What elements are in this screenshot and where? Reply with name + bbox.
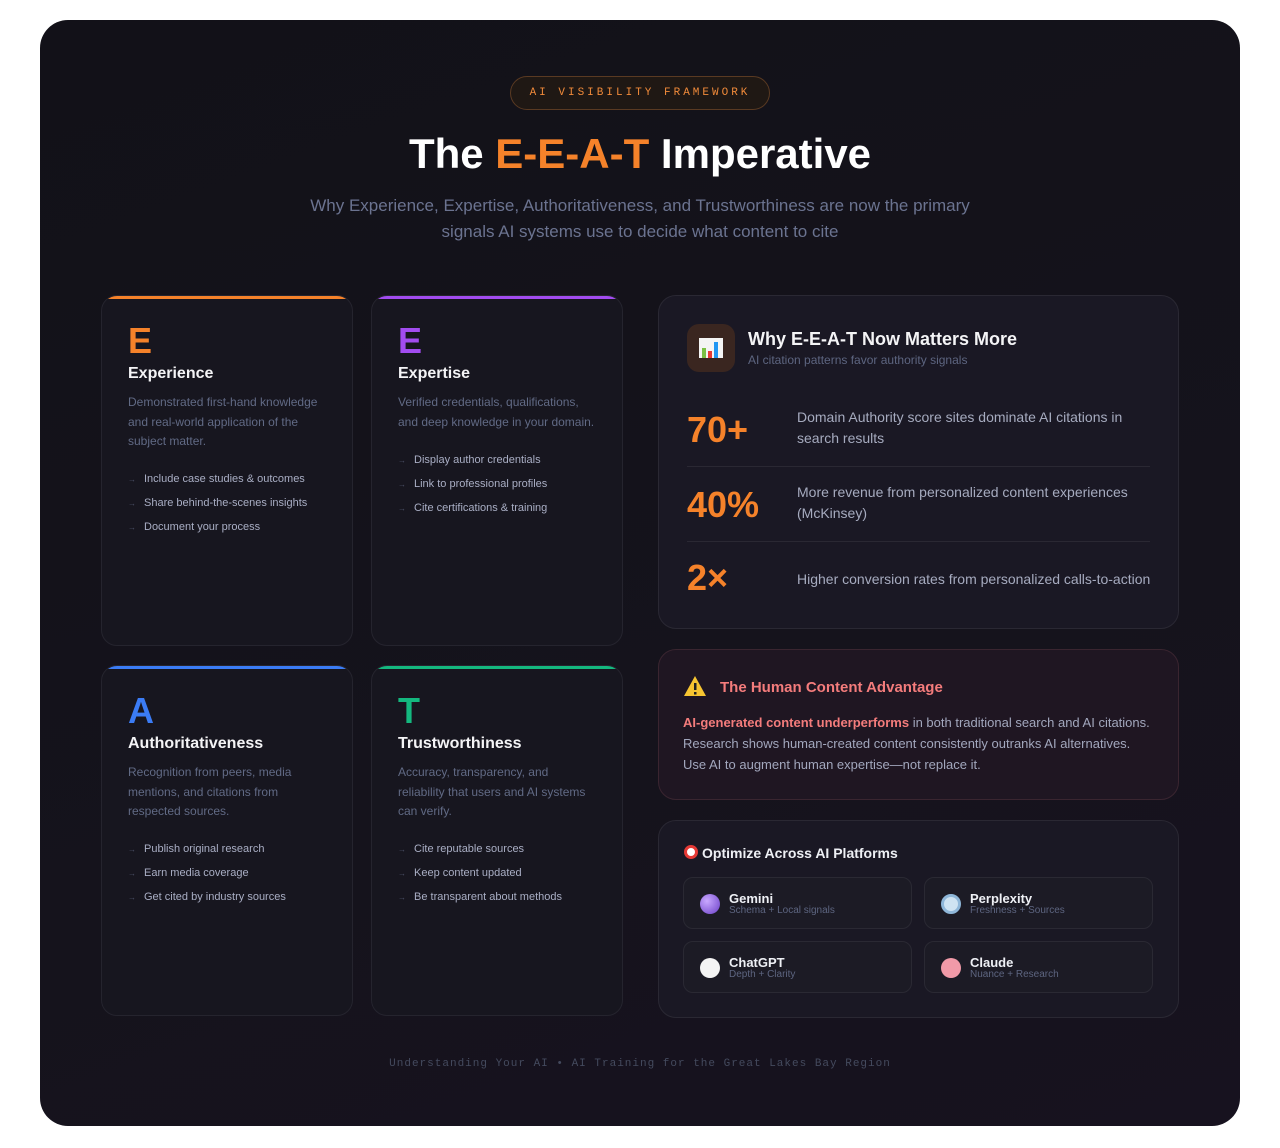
text: AI-generated content underperforms in both traditional search and AI citations. Research shows human-created content consistently outranks AI alternatives. Use AI to augment human expertise—not replace it. bbox=[683, 715, 1150, 772]
card: Trustworthiness: → Cite reputable sources bbox=[398, 843, 524, 855]
card: Authoritativeness: → Get cited by industry sources bbox=[128, 891, 286, 903]
card: Experience: → Include case studies & outcomes bbox=[128, 473, 305, 485]
platform Claude: Nuance + Research bbox=[970, 969, 1059, 980]
card: Expertise: Verified credentials, qualifications, and deep knowledge in your domain. bbox=[398, 395, 594, 428]
card: Authoritativeness: → Earn media coverage bbox=[128, 867, 249, 879]
card: Trustworthiness: T bbox=[398, 690, 420, 731]
card: Expertise: → Cite certifications & training bbox=[398, 502, 547, 514]
stat 40%: 40% bbox=[687, 484, 759, 525]
badge: AI VISIBILITY FRAMEWORK bbox=[530, 87, 750, 99]
stat 2x: Higher conversion rates from personalized calls-to-action bbox=[797, 571, 1150, 587]
card: Trustworthiness: Accuracy, transparency, and reliability that users and AI systems can verify. bbox=[398, 765, 585, 818]
icon: warning bbox=[684, 676, 706, 696]
platform Gemini: Schema + Local signals bbox=[729, 905, 835, 916]
platform Claude bbox=[924, 941, 1153, 993]
card: Authoritativeness: A bbox=[128, 690, 154, 731]
platform Gemini bbox=[683, 877, 912, 929]
stat 2x: 2× bbox=[687, 557, 728, 598]
card: Experience: → Document your process bbox=[128, 521, 260, 533]
heading: Optimize Across AI Platforms bbox=[702, 845, 898, 861]
card: Trustworthiness: → Be transparent about methods bbox=[398, 891, 562, 903]
card: Expertise bbox=[371, 295, 623, 646]
card: Experience: Experience bbox=[128, 365, 213, 382]
subtitle: Why Experience, Expertise, Authoritativeness, and Trustworthiness are now the primary signals AI systems use to decide what content to cite bbox=[310, 196, 970, 241]
panel: why E-E-A-T matters bbox=[658, 295, 1179, 629]
stat 40%: More revenue from personalized content experiences (McKinsey) bbox=[797, 484, 1128, 521]
stat 2x bbox=[687, 557, 1150, 598]
panel: optimize platforms bbox=[658, 820, 1179, 1018]
card: Authoritativeness: Recognition from peers, media mentions, and citations from respected sources. bbox=[128, 765, 291, 818]
panel: why E-E-A-T matters: AI citation patterns favor authority signals bbox=[748, 353, 967, 367]
icon: chart bbox=[687, 324, 735, 372]
card: Trustworthiness bbox=[371, 665, 623, 1016]
card: Expertise: → Link to professional profiles bbox=[398, 478, 547, 490]
title: The E-E-A-T Imperative bbox=[409, 130, 871, 177]
card: Experience: → Share behind-the-scenes insights bbox=[128, 497, 307, 509]
card: Experience: E bbox=[128, 320, 152, 361]
card: Experience: Demonstrated first-hand knowledge and real-world application of the subject matter. bbox=[128, 395, 317, 448]
card: Trustworthiness: Trustworthiness bbox=[398, 735, 522, 752]
platform ChatGPT: Depth + Clarity bbox=[729, 969, 795, 980]
platform Claude: Claude bbox=[970, 955, 1013, 970]
card: Authoritativeness: → Publish original research bbox=[128, 843, 264, 855]
stat 70+: Domain Authority score sites dominate AI citations in search results bbox=[797, 409, 1122, 446]
card: Expertise: Expertise bbox=[398, 365, 470, 382]
panel: human content advantage bbox=[658, 649, 1179, 800]
platform Gemini: Gemini bbox=[729, 891, 773, 906]
platform ChatGPT bbox=[683, 941, 912, 993]
badge bbox=[510, 76, 770, 110]
stat 70+: 70+ bbox=[687, 409, 748, 450]
heading: Why E-E-A-T Now Matters More bbox=[748, 329, 1017, 349]
card: Expertise: → Display author credentials bbox=[398, 454, 541, 466]
card: Authoritativeness: Authoritativeness bbox=[128, 735, 263, 752]
card: Experience bbox=[101, 295, 353, 646]
platform Perplexity bbox=[924, 877, 1153, 929]
platform Perplexity: Freshness + Sources bbox=[970, 905, 1065, 916]
platform ChatGPT: ChatGPT bbox=[729, 955, 785, 970]
card: Expertise: E bbox=[398, 320, 422, 361]
card: Trustworthiness: → Keep content updated bbox=[398, 867, 522, 879]
stat 40% bbox=[687, 484, 1128, 525]
panel: human content advantage: The Human Content Advantage bbox=[720, 679, 943, 696]
stat 70+ bbox=[687, 409, 1122, 450]
card: Authoritativeness bbox=[101, 665, 353, 1016]
footer: Understanding Your AI • AI Training for the Great Lakes Bay Region bbox=[389, 1058, 891, 1070]
platform Perplexity: Perplexity bbox=[970, 891, 1032, 906]
